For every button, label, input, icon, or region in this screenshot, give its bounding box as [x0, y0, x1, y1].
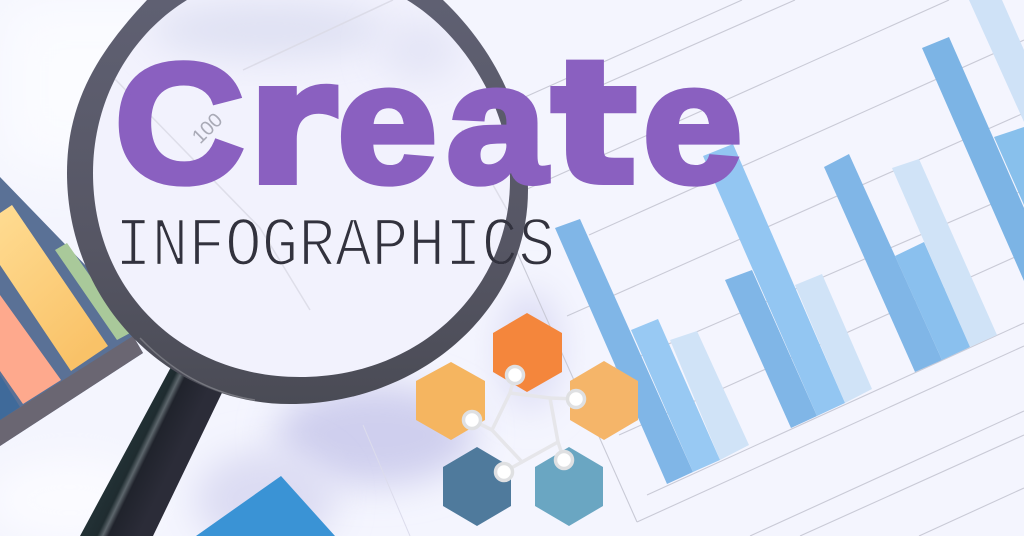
title: Create: t [551, 25, 637, 223]
chart grid lines [505, 0, 1024, 536]
lens rim [67, 0, 528, 404]
hexagon: teal [535, 447, 603, 526]
lens glass [93, 0, 510, 377]
title: Create: a [446, 29, 548, 219]
magnifying glass [60, 0, 540, 536]
title: Create: e [642, 29, 743, 219]
title: Create: C [114, 29, 245, 219]
blue triangle shape at bottom [196, 476, 335, 536]
network nodes [464, 366, 584, 480]
hexagon: yellow right [570, 361, 638, 440]
network lines [472, 375, 576, 472]
hexagon: orange top [493, 313, 562, 392]
bar chart [555, 0, 1024, 484]
handle [80, 354, 232, 536]
mini colour chart on the left [0, 177, 143, 446]
title: Create: e [337, 29, 437, 219]
subtitle: INFOGRAPHICS: INFOGRAPHICS [115, 208, 555, 287]
hexagon network icon [416, 313, 638, 526]
axis label 100: 100 [188, 109, 227, 148]
hexagon: yellow left [416, 362, 485, 440]
hexagon: dark blue [443, 447, 511, 526]
title: Create: r [247, 25, 336, 223]
